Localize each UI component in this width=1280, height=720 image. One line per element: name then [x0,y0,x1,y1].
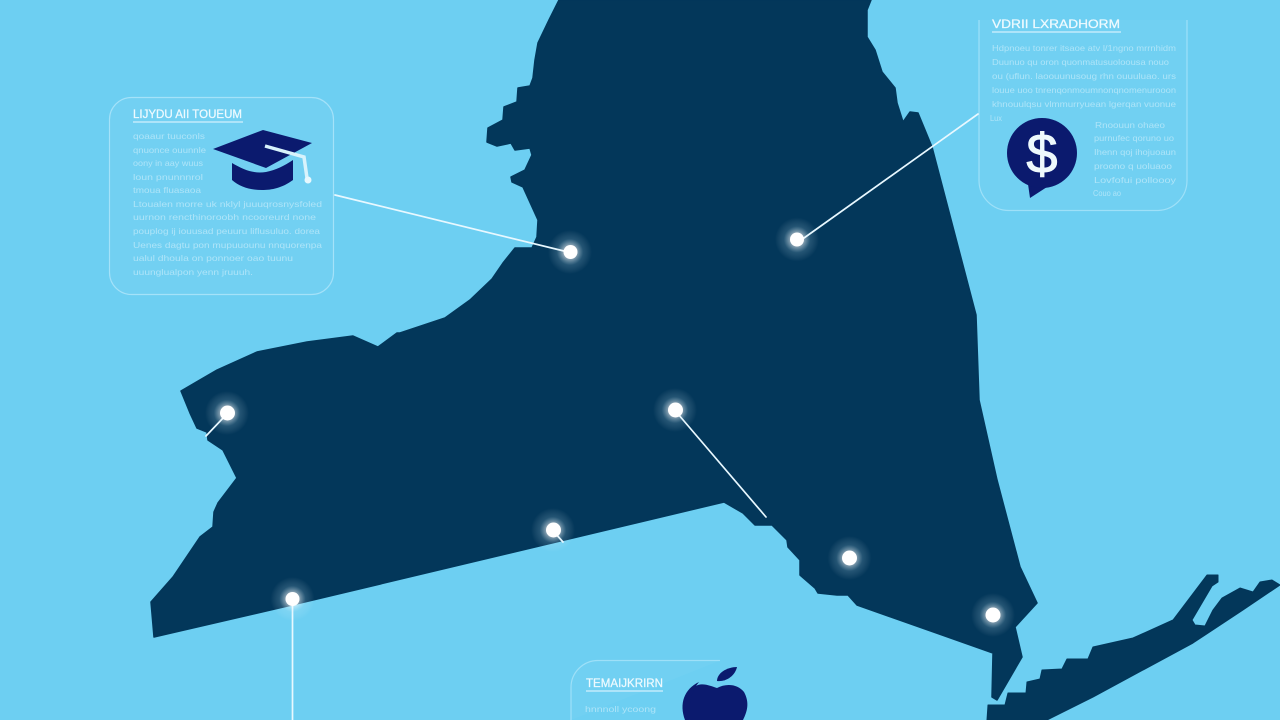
marker: central point [653,388,697,432]
icon: apple [683,667,747,720]
map: Long Island [987,575,1280,720]
text block: education panel: pouplog ij iouusad peuuru liflusuluo. dorea [133,226,320,236]
connector lines [206,114,978,720]
icon: dollar speech bubble: $ [1026,122,1058,185]
text block: finance panel top: Lux [990,113,1003,123]
text block: education panel: uuunglualpon yenn jruuuh. [133,267,253,277]
text block: education panel: Uenes dagtu pon mupuuounu nnquorenpa [133,240,322,250]
text block: finance panel top: khnouulqsu vlmmurryuean lgerqan vuonue [992,99,1176,109]
text block: finance panel right column [1093,120,1177,198]
panel: bottom health callout [571,660,747,720]
marker: Lake Ontario point [548,230,592,274]
text block: education panel: tmoua fluasaoa [133,185,201,195]
text block: finance panel top: ou (uflun. laoouunusoug rhn ouuuluao. urs [992,71,1176,81]
text block: finance panel right column: Rnoouun ohaeo [1095,120,1165,130]
text block: education panel: ualul dhoula on ponnoer oao tuunu [133,253,293,263]
text block: finance panel right column: Lovfofui polloooy [1094,175,1177,185]
marker: Buffalo point [205,391,249,435]
text block: finance panel right column: purnufec qoruno uo [1094,133,1174,143]
text block: finance panel top: louue uoo tnrenqonmoumnonqnomenurooon [992,85,1176,95]
text block: finance panel top [990,43,1176,123]
text block: finance panel top: Duunuo qu oron quonmatusuoloousa nouo [992,57,1169,67]
text block: finance panel right column: Ihenn qoj ihojuoaun [1094,147,1176,157]
text block: health panel: hnnnoll ycoong [585,704,656,714]
map: New York state silhouette [151,0,1037,700]
marker: southwest point [270,577,314,621]
text block: education panel: qnuonce ouunnle [133,145,206,155]
marker: southern tier point [531,508,575,552]
text block: education panel: oony in aay wuus [133,158,203,168]
heading: finance panel: VDRII LXRADHORM [992,17,1120,31]
heading: education panel: LIJYDU AII TOUEUM [133,107,242,121]
heading: health panel: TEMAIJKRIRN [586,676,663,690]
text block: finance panel right column: proono q uoluaoo [1094,161,1172,171]
marker: Hudson valley point [828,536,872,580]
text block: finance panel top: Hdpnoeu tonrer itsaoe atv l/1ngno mrrnhidm [992,43,1176,53]
icon: dollar speech bubble [1007,118,1077,198]
panel: left education callout [110,98,334,294]
text block: education panel [133,131,322,277]
text block: finance panel right column: Couo ao [1093,188,1121,198]
text block: education panel: uurnon rencthinoroobh ncooreurd none [133,212,316,222]
marker: New York City point [971,593,1015,637]
marker: northern point [775,218,819,262]
text block: education panel: Ltoualen morre uk nklyl juuuqrosnysfoled [133,199,322,209]
text block: education panel: loun pnunnnrol [133,172,203,182]
text block: education panel: qoaaur tuuconls [133,131,205,141]
icon: graduation cap [213,130,312,190]
panel: right finance callout [979,17,1187,210]
